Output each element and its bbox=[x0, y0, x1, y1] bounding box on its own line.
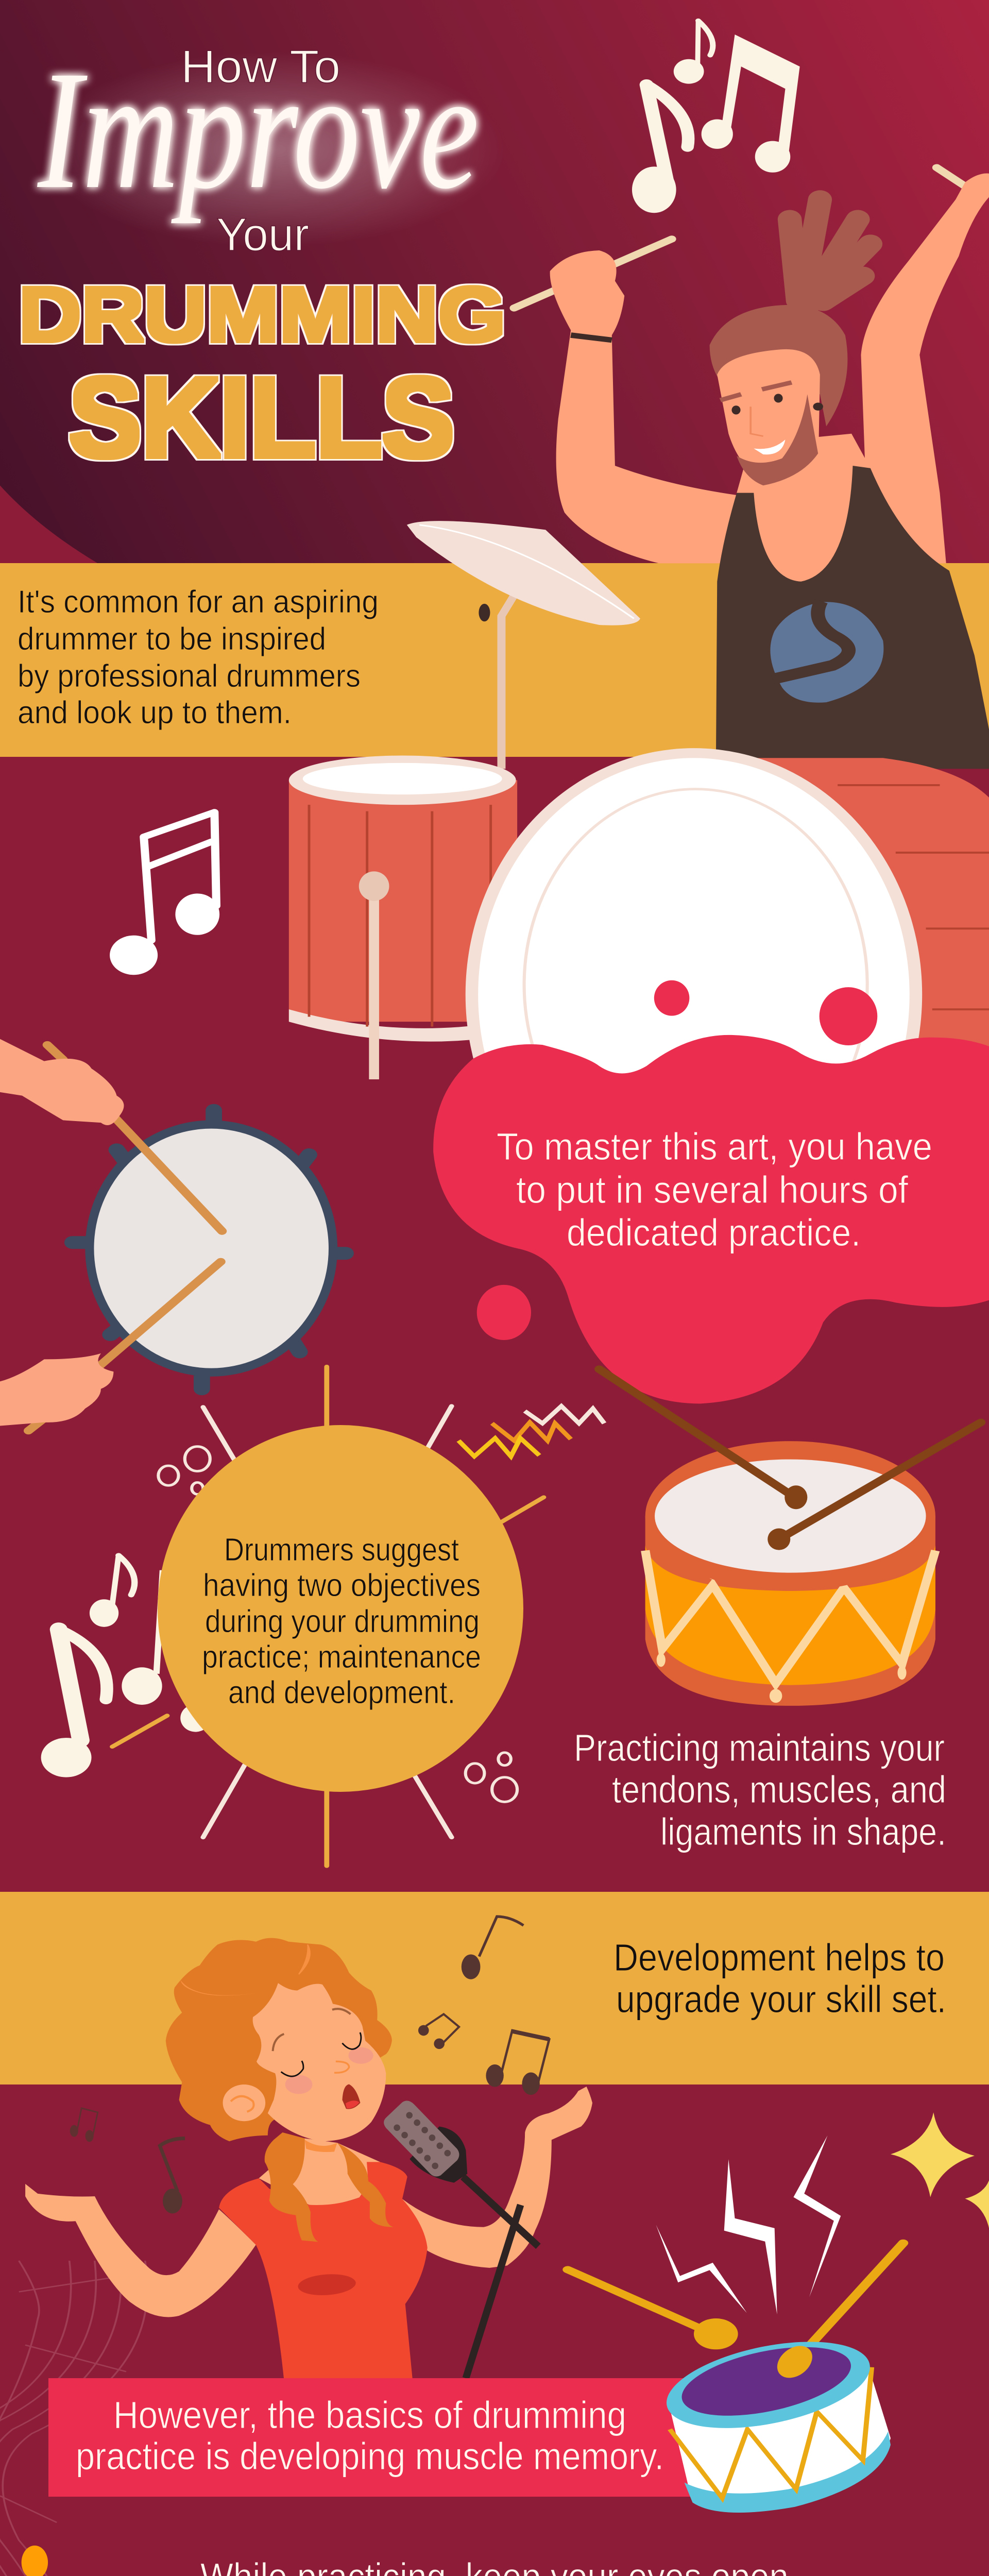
hair bbox=[710, 305, 847, 426]
wristband bbox=[571, 335, 612, 340]
collar shadow bbox=[305, 2140, 337, 2152]
text: practicing maintains bbox=[574, 1726, 946, 1853]
icon: cream notes left bbox=[41, 1555, 211, 1777]
title bbox=[19, 36, 506, 481]
panel: two objectives circle: and development. bbox=[228, 1675, 455, 1710]
title: Improve bbox=[36, 36, 479, 224]
nose bbox=[334, 2061, 349, 2073]
illustration: male drummer bbox=[514, 167, 989, 769]
illustration: small colored drum bbox=[568, 2243, 903, 2513]
title glow bbox=[41, 52, 505, 247]
icon: sparkle stars bbox=[891, 2112, 989, 2228]
left arm bbox=[25, 2184, 256, 2317]
panel: two objectives circle bbox=[158, 1425, 523, 1792]
text: gold band intro: It's common for an aspiring bbox=[18, 584, 379, 620]
panel: two objectives circle: having two objectives bbox=[203, 1568, 481, 1603]
neck and chest bbox=[259, 2138, 380, 2206]
illustration: cymbal top bbox=[407, 521, 640, 769]
panel: two objectives circle: Drummers suggest bbox=[224, 1532, 459, 1568]
icon: dark small notes bbox=[70, 1917, 549, 2213]
tank top bbox=[716, 466, 989, 769]
callout blob: master this art: dedicated practice. bbox=[567, 1211, 861, 1254]
illustration: orange drum bbox=[599, 1369, 981, 1706]
text: gold band intro bbox=[18, 584, 379, 731]
hair strands bbox=[265, 2132, 318, 2242]
hair bbox=[166, 1938, 392, 2141]
drumsticks brown bbox=[599, 1369, 981, 1539]
chest and neck bbox=[725, 434, 871, 591]
callout blob: master this art: To master this art, you have bbox=[497, 1125, 932, 1168]
top gradient backdrop bbox=[0, 0, 989, 564]
text: gold band intro: by professional drummers bbox=[18, 658, 361, 694]
text: practicing maintains: ligaments in shape. bbox=[660, 1810, 946, 1853]
text: development helps: upgrade your skill set. bbox=[616, 1978, 946, 2021]
text: practicing maintains: Practicing maintains your bbox=[574, 1726, 945, 1769]
beard bbox=[737, 394, 818, 485]
drumstick right bbox=[936, 167, 968, 188]
panel: two objectives circle: practice; maintenance bbox=[202, 1639, 481, 1675]
title: SKILLS bbox=[69, 354, 454, 481]
drumsticks bbox=[28, 1045, 222, 1431]
mouth bbox=[342, 2084, 360, 2109]
text: practicing maintains: tendons, muscles, and bbox=[612, 1768, 946, 1811]
faint sheet music staff bbox=[0, 2261, 147, 2576]
illustration: snare drum top view bbox=[0, 1039, 346, 1431]
callout blob: master this art bbox=[433, 1035, 989, 1403]
eyes and brows bbox=[281, 2032, 361, 2076]
illustration: floor tom bbox=[289, 756, 517, 1079]
text: gold band intro: and look up to them. bbox=[18, 695, 292, 731]
panel: two objectives circle: during your drumming bbox=[205, 1604, 480, 1639]
icon: music notes top bbox=[632, 21, 800, 213]
right arm bbox=[861, 174, 989, 563]
text: development helps: Development helps to bbox=[613, 1936, 945, 1979]
right arm bbox=[402, 2087, 592, 2268]
ear bbox=[223, 2084, 265, 2121]
face bbox=[717, 349, 820, 481]
hand top bbox=[0, 1039, 124, 1125]
callout: muscle memory: practice is developing muscle memory. bbox=[76, 2435, 664, 2478]
icon: crossed sticks left bbox=[0, 2546, 141, 2576]
callout: muscle memory: However, the basics of drumming bbox=[113, 2394, 626, 2436]
title: How To bbox=[181, 41, 340, 93]
sunburst rays and circles bbox=[112, 1367, 604, 1866]
gold band 1 bbox=[0, 563, 989, 757]
text: gold band intro: drummer to be inspired bbox=[18, 621, 326, 657]
drumstick left bbox=[514, 239, 672, 308]
hair bun bbox=[790, 199, 871, 301]
icon: lightning bolts bbox=[656, 2136, 841, 2314]
face details bbox=[720, 382, 823, 454]
shirt logo bbox=[770, 601, 883, 703]
microphone bbox=[384, 2101, 467, 2183]
callout blob: master this art: to put in several hours of bbox=[516, 1168, 908, 1211]
title: Your bbox=[216, 209, 309, 261]
icon: white beamed note bbox=[110, 812, 219, 975]
left arm bbox=[550, 250, 738, 563]
cheeks bbox=[285, 2075, 312, 2094]
gold band 2 bbox=[0, 1892, 989, 2084]
callout: muscle memory bbox=[48, 2378, 694, 2497]
dress bbox=[219, 2162, 428, 2380]
title: DRUMMING bbox=[19, 271, 506, 358]
face bbox=[253, 1983, 386, 2141]
text: development helps bbox=[613, 1936, 946, 2021]
hand bottom bbox=[0, 1353, 113, 1426]
illustration: bass drum bbox=[466, 748, 989, 1241]
illustration: singer bbox=[25, 1938, 592, 2380]
microphone stand bbox=[463, 2177, 538, 2378]
